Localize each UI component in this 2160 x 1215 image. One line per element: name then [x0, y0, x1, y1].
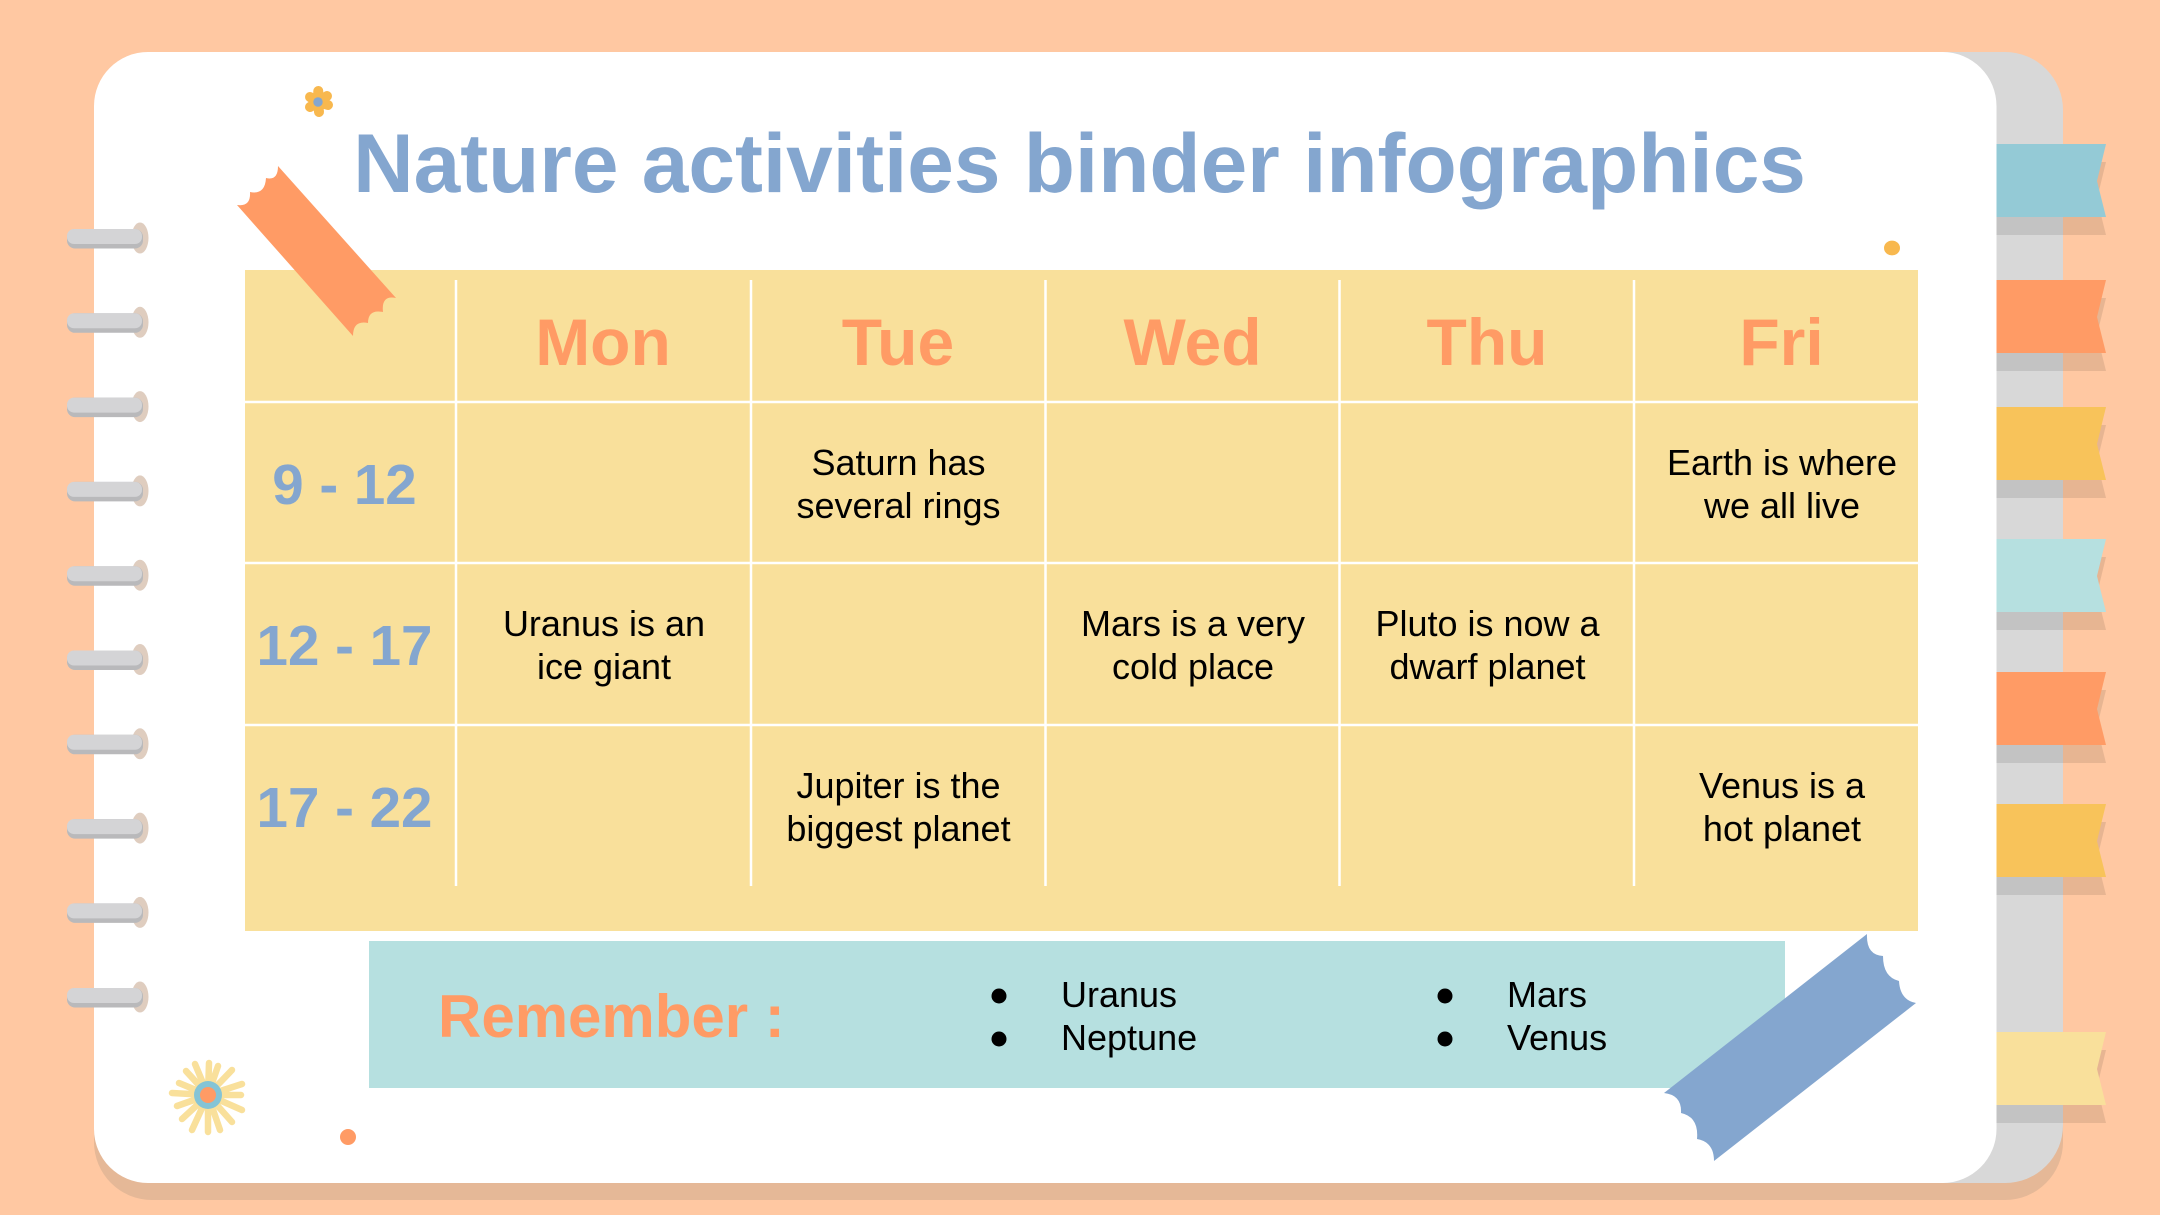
- weekday headers: Thu: [1427, 305, 1547, 379]
- title: Nature activities binder infographics: [353, 116, 1806, 210]
- cell: Tue 9-12: several rings: [796, 485, 1001, 526]
- ring 7: [67, 728, 148, 759]
- orange washi tape: [237, 166, 396, 336]
- cell: Wed 12-17: Mars is a very: [1081, 603, 1305, 644]
- cell: Fri 9-12: we all live: [1703, 485, 1860, 526]
- weekday headers: Tue: [842, 305, 954, 379]
- time slot labels: 12 - 17: [257, 614, 432, 677]
- weekday headers: Mon: [535, 305, 671, 379]
- cell: Mon 12-17: ice giant: [537, 646, 671, 687]
- ring 4: [67, 475, 148, 506]
- tab: amber: [1996, 407, 2106, 480]
- index tabs: [1996, 144, 2106, 1105]
- ring 9: [67, 897, 148, 928]
- cell: Fri 17-22: hot planet: [1703, 808, 1861, 849]
- bullet list: Uranus, Neptune: [992, 974, 1197, 1058]
- cell: Thu 12-17: dwarf planet: [1389, 646, 1586, 687]
- table grid lines: [245, 280, 1918, 886]
- decorative amber dot: [1884, 241, 1900, 255]
- table background: [245, 270, 1918, 931]
- cell: Tue 17-22: Jupiter is the: [796, 765, 1001, 806]
- weekday headers: [535, 305, 1824, 379]
- bullet list: Mars, Venus: Mars: [1507, 974, 1587, 1015]
- ring 2: [67, 307, 148, 338]
- ring 6: [67, 644, 148, 675]
- ring 10: [67, 982, 148, 1012]
- icon: small amber flower: [310, 91, 328, 112]
- cell: Fri 17-22: Venus is a: [1699, 765, 1866, 806]
- panel: remember bar: [369, 941, 1785, 1088]
- tab: orange lower: [1996, 672, 2106, 745]
- weekday headers: Fri: [1739, 305, 1824, 379]
- time slot labels: 9 - 12: [272, 453, 417, 516]
- schedule table: [245, 270, 1918, 931]
- time slot labels: [257, 453, 432, 839]
- tab: yellow: [1996, 1032, 2106, 1105]
- binder back page: [1700, 52, 2063, 1183]
- cell: Tue 17-22: biggest planet: [786, 808, 1011, 849]
- cell: Thu 12-17: Pluto is now a: [1375, 603, 1601, 644]
- icon: sun flower: [172, 1063, 242, 1132]
- cell: Wed 12-17: cold place: [1112, 646, 1274, 687]
- bullet list: Mars, Venus: Venus: [1507, 1017, 1607, 1058]
- tab: amber lower: [1996, 804, 2106, 877]
- cell: Fri 9-12: Earth is where: [1667, 442, 1897, 483]
- tab shadows: [1996, 162, 2106, 1123]
- bullet list: Uranus, Neptune: Uranus: [1061, 974, 1177, 1015]
- bullet list: Mars, Venus: [1438, 974, 1607, 1058]
- spiral rings: [67, 222, 148, 1012]
- cell: Tue 9-12: Saturn has: [811, 442, 986, 483]
- blue washi tape: [1664, 934, 1916, 1161]
- table cell entries: [503, 442, 1897, 849]
- tab: mint: [1996, 539, 2106, 612]
- tab: blue: [1996, 144, 2106, 217]
- decorative orange dot: [340, 1129, 356, 1145]
- remember heading: Remember :: [438, 983, 785, 1050]
- time slot labels: 17 - 22: [257, 776, 432, 839]
- ring 3: [67, 391, 148, 422]
- ring 1: [67, 222, 148, 254]
- tab: orange: [1996, 280, 2106, 353]
- ring 8: [67, 813, 148, 844]
- ring 5: [67, 560, 148, 591]
- weekday headers: Wed: [1123, 305, 1262, 379]
- cell: Mon 12-17: Uranus is an: [503, 603, 705, 644]
- bullet list: Uranus, Neptune: Neptune: [1061, 1017, 1197, 1058]
